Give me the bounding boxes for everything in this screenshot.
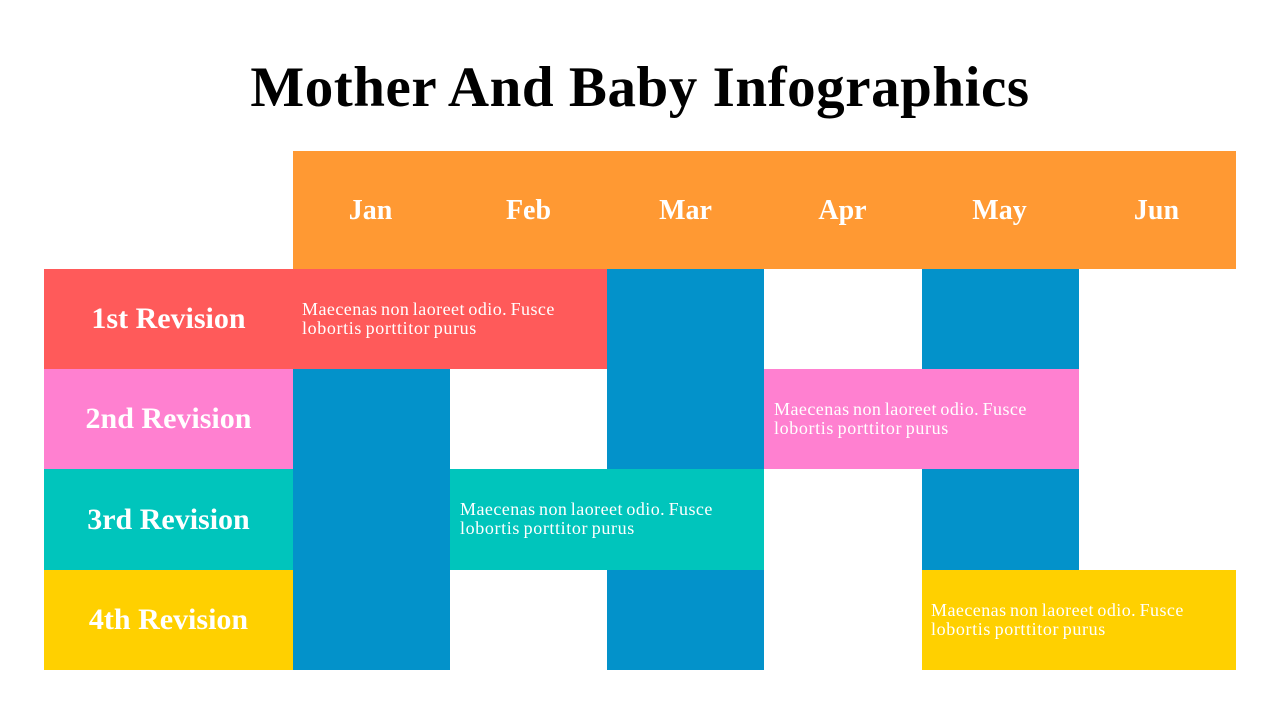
row label: 2nd Revision: 2nd Revision <box>86 402 251 435</box>
title: Mother And Baby Infographics <box>250 56 1030 119</box>
blue block: May lower <box>922 469 1079 570</box>
text bar: 3rd Revision <box>450 469 764 570</box>
text bar: 3rd Revision: Maecenas non laoreet odio. Fusce <box>460 499 713 519</box>
text bar: 2nd Revision <box>764 369 1079 469</box>
month: Jan: Jan <box>349 195 392 226</box>
month header band <box>293 151 1236 269</box>
text bar: 2nd Revision: Maecenas non laoreet odio. Fusce <box>774 399 1027 419</box>
row label: 2nd Revision <box>44 369 293 469</box>
month: Apr: Apr <box>818 195 867 226</box>
text bar: 2nd Revision: lobortis porttitor purus <box>774 418 949 438</box>
text bar: 1st Revision: lobortis porttitor purus <box>302 318 477 338</box>
row label: 1st Revision: 1st Revision <box>91 302 246 335</box>
row label: 3rd Revision <box>44 469 293 570</box>
text bar: 4th Revision <box>922 570 1236 670</box>
row label: 1st Revision <box>44 269 293 369</box>
blue block: Mar upper <box>607 269 764 469</box>
month: May: May <box>972 195 1027 226</box>
text bar: 4th Revision: lobortis porttitor purus <box>931 619 1106 639</box>
text bar: 3rd Revision: lobortis porttitor purus <box>460 518 635 538</box>
blue block: Mar lower <box>607 570 764 670</box>
text bar: 1st Revision <box>293 269 607 369</box>
text bar: 1st Revision: Maecenas non laoreet odio. Fusce <box>302 299 555 319</box>
row label: 4th Revision <box>44 570 293 670</box>
row label: 4th Revision: 4th Revision <box>89 603 248 636</box>
blue block: May upper <box>922 269 1079 369</box>
blue block: Jan <box>293 369 450 670</box>
row label: 3rd Revision: 3rd Revision <box>87 503 250 536</box>
text bar: 4th Revision: Maecenas non laoreet odio. Fusce <box>931 600 1184 620</box>
month: Jun: Jun <box>1134 195 1179 226</box>
month: Mar: Mar <box>659 195 712 226</box>
month: Feb: Feb <box>506 195 551 226</box>
